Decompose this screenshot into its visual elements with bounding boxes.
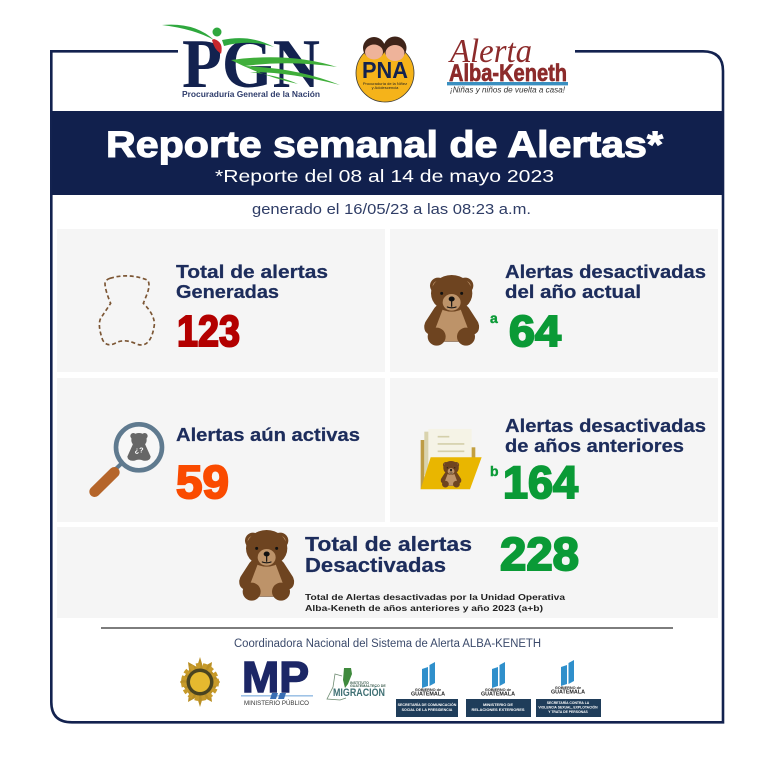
icon: dashed bear outline	[99, 276, 154, 345]
logo: Secretaría contra la violencia sexual: GOBIERNO de	[555, 686, 581, 690]
heading: Desactivadas	[305, 554, 446, 577]
icon: magnifying glass with bear: ¿?	[135, 446, 144, 455]
logo: Alerta Alba-Keneth: Alba-Keneth	[449, 60, 567, 87]
number 164: 164	[503, 457, 578, 508]
logo: Secretaría de Comunicación: GUATEMALA	[411, 692, 445, 698]
logo: Ministerio de Relaciones Exteriores: RELACIONES EXTERIORES	[471, 707, 525, 712]
logo: PNA: Procuraduría de la Niñez	[363, 81, 407, 86]
logo: Ministerio de Relaciones Exteriores: GOBIERNO de	[485, 688, 511, 692]
heading: Generadas	[176, 281, 279, 302]
panel: desactivadas año actual	[390, 229, 718, 372]
logo: Secretaría contra la violencia sexual: VIOLENCIA SEXUAL, EXPLOTACIÓN	[538, 704, 598, 710]
heading	[176, 261, 328, 302]
heading: Total de alertas	[176, 261, 328, 282]
number 59: 59	[176, 456, 229, 508]
page frame	[51, 51, 723, 722]
icon: magnifying glass with bear	[95, 424, 162, 492]
logo: PNA: PNA	[362, 57, 408, 83]
panel: desactivadas años anteriores	[390, 378, 718, 522]
panel: total desactivadas	[57, 527, 718, 618]
logo: PGN: PGN	[182, 26, 320, 103]
panel: aún activas	[57, 378, 385, 522]
logo: Migración: MIGRACIÓN	[333, 686, 385, 699]
note	[305, 592, 565, 613]
logo: Secretaría contra la violencia sexual: SECRETARÍA CONTRA LA	[547, 700, 590, 705]
logo: PNA: y Adolescencia	[372, 85, 399, 90]
logo: Ministerio de Relaciones Exteriores: MINISTERIO DE	[483, 702, 513, 707]
generated date: generado el 16/05/23 a las 08:23 a.m.	[252, 202, 531, 218]
logo: Alerta Alba-Keneth: ¡Niñas y niños de vuelta a casa!	[450, 84, 566, 94]
heading: Total de alertas	[305, 533, 472, 556]
divider	[101, 627, 673, 629]
logo: PNA	[356, 36, 414, 102]
logo: Ministerio de Relaciones Exteriores	[466, 662, 531, 717]
heading	[305, 533, 472, 577]
note: Alba-Keneth de años anteriores y año 2023 (a+b)	[305, 603, 543, 613]
logo: Ministerio Público: MP	[242, 653, 309, 702]
number 123: 123	[177, 307, 240, 356]
heading	[505, 415, 706, 456]
logo: Migración: INSTITUTO	[350, 681, 369, 685]
heading: Alertas aún activas	[176, 424, 360, 445]
logo: Alerta Alba-Keneth: Alerta	[448, 33, 532, 70]
heading: del año actual	[505, 281, 641, 302]
subtitle: *Reporte del 08 al 14 de mayo 2023	[215, 166, 554, 186]
logo: Migración: GUATEMALTECO DE	[350, 684, 386, 688]
logo: Ministerio de Relaciones Exteriores: GUATEMALA	[481, 692, 515, 698]
icon: folder with bear	[421, 429, 482, 489]
header band	[52, 111, 723, 195]
logo: Secretaría contra la violencia sexual: GUATEMALA	[551, 690, 585, 696]
heading	[505, 261, 706, 302]
PGN subtitle: Procuraduría General de la Nación	[182, 89, 320, 99]
logo: Secretaría de Comunicación: SECRETARÍA DE COMUNICACIÓN	[398, 702, 457, 707]
logo: Secretaría contra la violencia sexual	[536, 660, 601, 717]
number 64: 64	[509, 307, 562, 356]
label a: a	[490, 310, 498, 326]
label b: b	[490, 463, 499, 479]
icon: teddy bear	[424, 275, 479, 346]
logo: police badge	[180, 657, 220, 707]
logo: Secretaría de Comunicación: GOBIERNO de	[415, 688, 441, 692]
number 228: 228	[500, 528, 579, 580]
logo: Ministerio Público: MINISTERIO PÚBLICO	[244, 698, 309, 707]
note: Total de Alertas desactivadas por la Unidad Operativa	[305, 592, 565, 602]
logo: Migración	[327, 668, 386, 700]
footer heading: Coordinadora Nacional del Sistema de Alerta ALBA-KENETH	[234, 638, 541, 650]
icon: teddy bear	[239, 530, 294, 601]
heading: Alertas desactivadas	[505, 261, 706, 282]
logo: Secretaría de Comunicación: SOCIAL DE LA PRESIDENCIA	[402, 708, 453, 712]
panel: total generadas	[57, 229, 385, 372]
heading: Alertas desactivadas	[505, 415, 706, 436]
logo: Secretaría contra la violencia sexual: Y TRATA DE PERSONAS	[548, 710, 589, 714]
heading: de años anteriores	[505, 435, 684, 456]
title: Reporte semanal de Alertas*	[106, 124, 664, 165]
logo: Secretaría de Comunicación	[396, 662, 458, 717]
logo: Alerta Alba-Keneth	[447, 33, 568, 94]
